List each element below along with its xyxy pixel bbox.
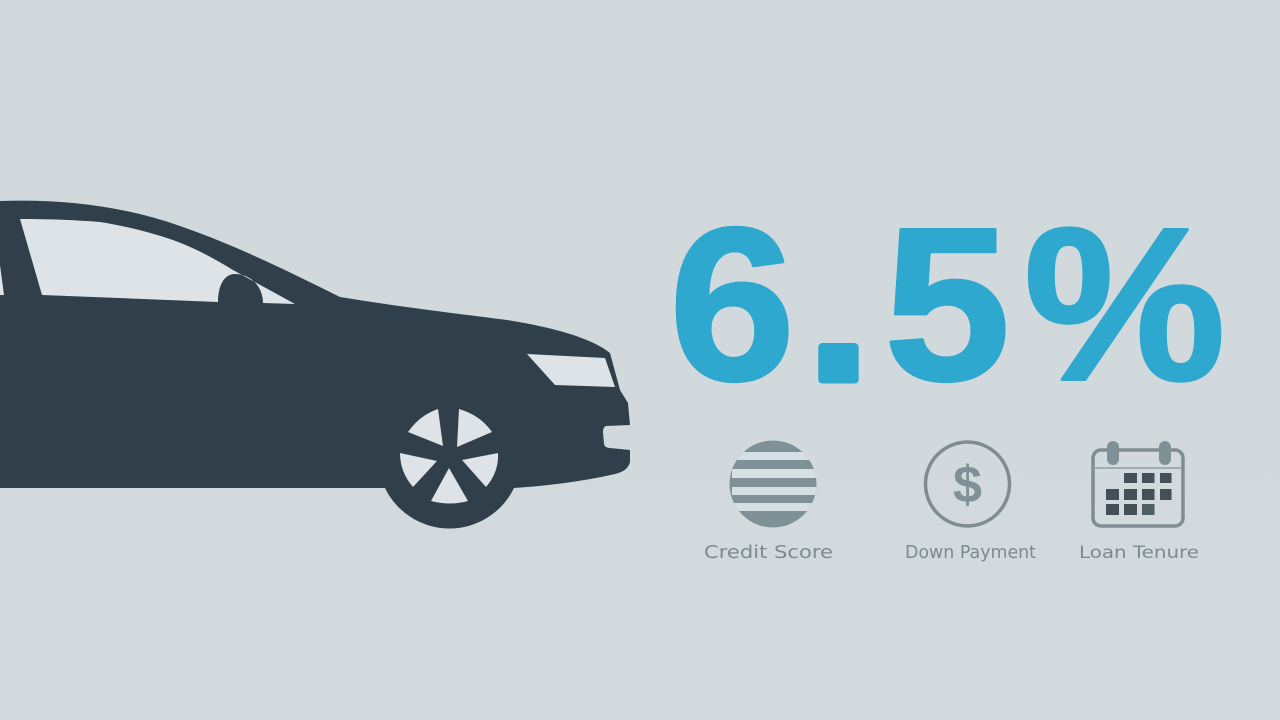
side window: [20, 219, 295, 304]
icon: dollar coin: $: [953, 456, 982, 514]
label: loan tenure: Loan Tenure: [1079, 543, 1199, 563]
label: credit score: Credit Score: [704, 542, 833, 563]
icon: credit score striped disc: [730, 440, 816, 528]
headline rate: 6.5%: 6: [669, 183, 795, 427]
wheel spokes: [400, 409, 498, 504]
headlight: [527, 354, 615, 387]
headline rate: 6.5%: 5: [884, 183, 1010, 427]
car silhouette: [0, 201, 630, 529]
headline rate: 6.5%: .: [807, 183, 870, 427]
icon: calendar: [1093, 441, 1183, 526]
icon: dollar coin: [926, 442, 1010, 526]
car body: [0, 201, 630, 529]
headline rate: 6.5%: %: [1024, 183, 1226, 427]
rear window sliver: [0, 265, 4, 295]
label: down payment: Down Payment: [905, 542, 1036, 563]
